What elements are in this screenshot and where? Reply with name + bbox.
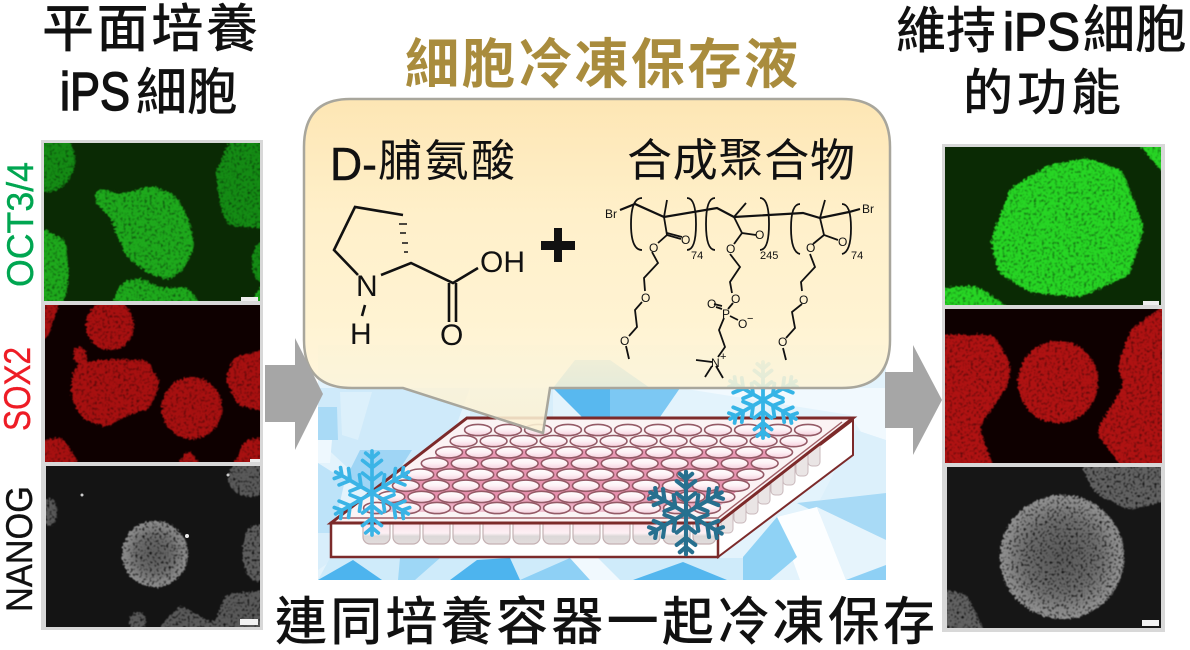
- chemical structure: synthetic polymer: O: [778, 335, 787, 349]
- title: flat culture iPS cells: 平面培養: [42, 1, 258, 59]
- plate: side tubes: [721, 438, 820, 533]
- chemical structure: synthetic polymer: O: [799, 293, 808, 307]
- micrograph: right SOX2 red: [945, 309, 1162, 463]
- plate: side face: [718, 420, 853, 557]
- snowflake: left light blue: [331, 451, 413, 535]
- panel: left micrographs frame: [41, 140, 263, 630]
- chemical structure: synthetic polymer: O: [726, 242, 735, 256]
- chemical structure: synthetic polymer: [605, 198, 874, 378]
- chemical structure: synthetic polymer: Br: [605, 207, 617, 221]
- chemical structure: synthetic polymer: 245: [760, 250, 778, 262]
- chemical structure: D-proline: [334, 207, 525, 352]
- heading: D-proline: [330, 137, 515, 190]
- chemical structure: D-proline: OH: [480, 246, 525, 279]
- micrograph: right OCT3/4 green: [945, 147, 1161, 305]
- plate: wells grid: [364, 424, 821, 514]
- plate: front face: [331, 523, 718, 557]
- chemical structure: synthetic polymer: Br: [862, 202, 874, 216]
- title: maintain iPS cell function: iPS: [1003, 3, 1080, 62]
- snowflake: right dark blue: [646, 472, 726, 554]
- title: flat culture iPS cells: 細胞: [136, 64, 238, 121]
- chemical structure: synthetic polymer: O: [838, 235, 847, 249]
- title: maintain iPS cell function: 細胞: [1083, 2, 1187, 60]
- heading: D-proline: 脯氨酸: [378, 137, 515, 186]
- title: cell cryopreservation solution: 細胞冷凍保存液: [405, 35, 798, 95]
- plus sign: [541, 228, 575, 262]
- 96-well plate: [331, 418, 853, 557]
- chemical structure: synthetic polymer: 74: [851, 250, 863, 262]
- chemical structure: synthetic polymer: O: [620, 334, 629, 348]
- chemical structure: D-proline: H: [350, 318, 372, 351]
- chemical structure: synthetic polymer: N: [711, 356, 720, 370]
- panel: right micrographs frame: [942, 144, 1165, 632]
- title: flat culture iPS cells: [42, 1, 258, 122]
- chemical structure: synthetic polymer: O: [707, 297, 716, 311]
- chemical structure: D-proline: O: [440, 319, 463, 352]
- snowflake: top right: [726, 362, 800, 438]
- background: low-poly ice pattern: [318, 345, 886, 580]
- chemical structure: synthetic polymer: O: [649, 241, 658, 255]
- chemical structure: synthetic polymer: −: [747, 313, 753, 325]
- title: maintain iPS cell function: 的功能: [963, 65, 1121, 121]
- plate: front tubes: [363, 513, 716, 544]
- heading: synthetic polymer: 合成聚合物: [627, 135, 855, 186]
- micrograph: left NANOG grayscale: [46, 466, 260, 627]
- title: maintain iPS cell function: 維持: [896, 3, 996, 59]
- heading: D-proline: D-: [330, 138, 377, 190]
- speech bubble: [304, 99, 890, 433]
- plate: pink well field: [372, 449, 785, 512]
- micrograph: left SOX2 red: [45, 305, 260, 462]
- chemical structure: synthetic polymer: +: [720, 351, 726, 363]
- plate: top surface: [331, 418, 853, 523]
- chemical structure: synthetic polymer: O: [681, 233, 690, 247]
- title: flat culture iPS cells: iPS: [60, 62, 130, 122]
- chemical structure: synthetic polymer: O: [806, 241, 815, 255]
- micrograph: left OCT3/4 green: [44, 143, 260, 301]
- chemical structure: synthetic polymer: P: [722, 307, 730, 321]
- arrow: right gray: [885, 345, 942, 455]
- label: NANOG: NANOG: [0, 486, 40, 612]
- chemical structure: synthetic polymer: O: [641, 291, 650, 305]
- title: maintain iPS cell function: [896, 2, 1187, 121]
- plate: rim lines: [342, 422, 842, 518]
- chemical structure: synthetic polymer: O: [731, 292, 740, 306]
- chemical structure: synthetic polymer: 74: [691, 250, 703, 262]
- micrograph: right NANOG grayscale: [947, 467, 1161, 628]
- chemical structure: synthetic polymer: O: [755, 228, 764, 242]
- arrow: left gray: [265, 338, 323, 450]
- label: OCT3/4: OCT3/4: [0, 162, 41, 287]
- chemical structure: synthetic polymer: O: [738, 317, 747, 331]
- chemical structure: D-proline: N: [356, 270, 378, 303]
